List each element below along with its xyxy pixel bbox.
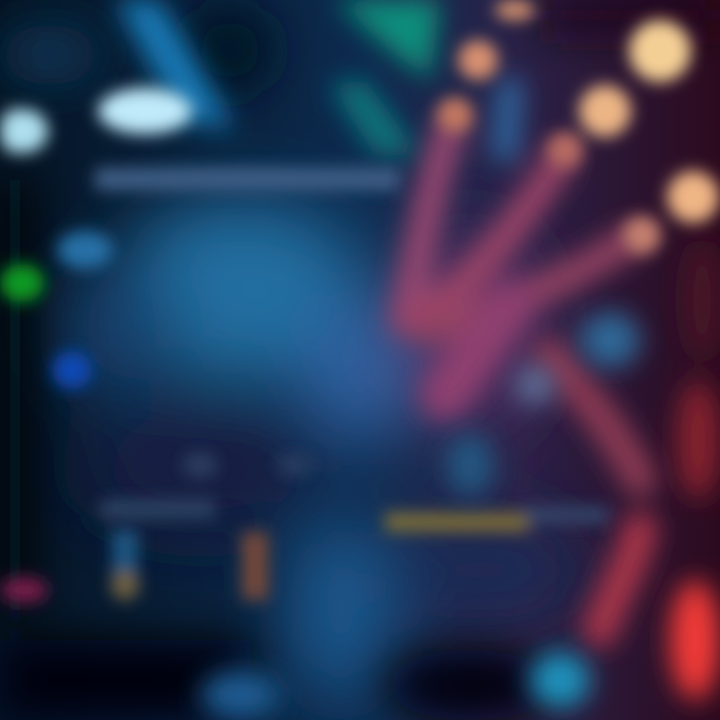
icon: light blue (57, 231, 113, 269)
icon: blue (52, 351, 92, 389)
white-cyan lights (0, 88, 192, 153)
icon: green (0, 264, 44, 302)
status icons (0, 231, 113, 603)
cyan spot (200, 652, 590, 720)
pink strands (405, 90, 640, 630)
glowing orbs (437, 0, 719, 254)
top light beams (115, 0, 440, 155)
panel: central blue glow (60, 200, 590, 700)
heading bar (95, 168, 400, 190)
text bars and small chart (100, 452, 610, 600)
icon: crimson (0, 577, 48, 603)
red glows (670, 240, 720, 700)
blue accents on the right (446, 312, 640, 497)
